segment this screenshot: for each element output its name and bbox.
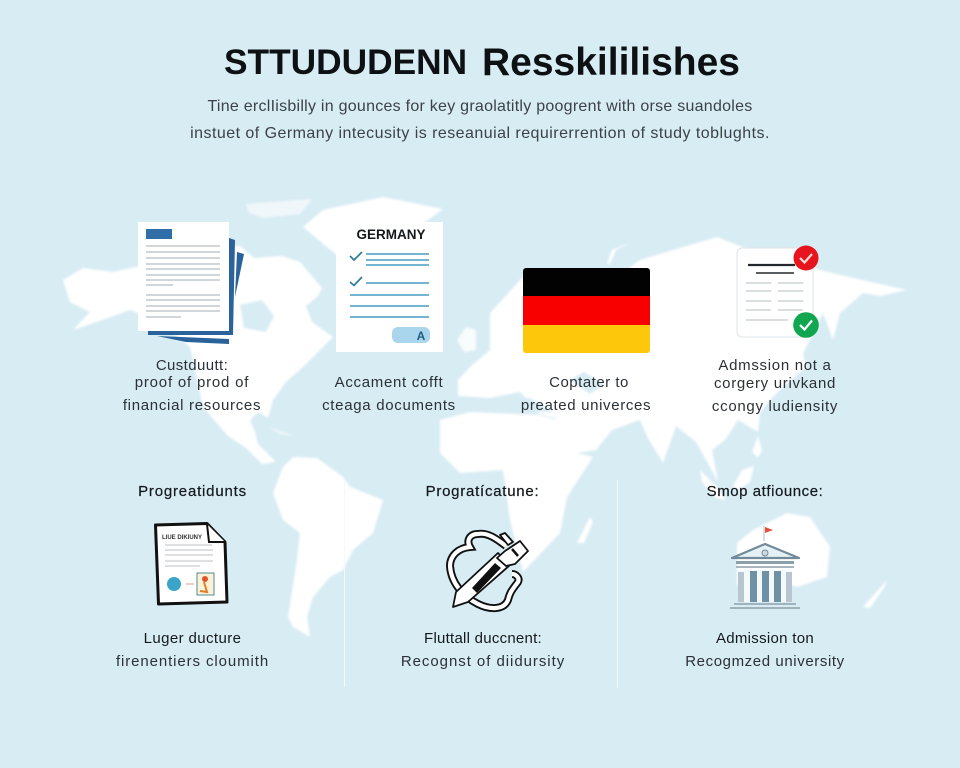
label: universities [521,374,651,414]
title [224,41,740,84]
label: documents [322,374,456,414]
icon: certificate document: LIUE DIKIUNY [162,535,202,541]
label: documents: Accament cofft [335,374,443,391]
label: financial resources: Custduutt: [156,357,228,374]
label: further document left: Luger ducture [144,630,241,647]
heading: column one: Progreatidunts [138,483,247,500]
label: further document left [116,630,269,670]
title: Resskililishes [482,41,740,84]
icon: Germany checklist: GERMANY [356,227,426,242]
heading: column three: Smop atfiounce: [707,483,823,500]
label: further document left: firenentiers cloumith [116,653,269,670]
icon: German flag [523,268,650,353]
title: STTUDUDENN [224,43,467,82]
label: financial resources [123,357,261,414]
label: admission to recognized university: Admission ton [716,630,814,647]
subtitle: Tine erclIisbilly in gounces for key graolatitly poogrent with orse suandoles [207,98,753,115]
label: admission: corgery urivkand [714,375,836,392]
label: admission to recognized university [685,630,845,670]
label: further document centre: Recognst of diidursity [401,653,565,670]
label: further document centre: Fluttall duccnent: [424,630,542,647]
label: admission: ccongy ludiensity [712,398,838,415]
label: financial resources: financial resources [123,397,261,414]
column divider right [617,480,618,688]
label: admission [712,357,838,415]
label: universities: preated univerces [521,397,651,414]
heading: column two: Progratícatune: [426,483,539,500]
label: admission: Admssion not a [718,357,832,374]
label: financial resources: proof of prod of [135,374,249,391]
subtitle [190,98,770,142]
icon: Germany checklist: A [417,329,426,343]
label: documents: cteaga documents [322,397,456,414]
label: admission to recognized university: Recogmzed university [685,653,845,670]
label: universities: Coptater to [549,374,629,391]
column divider left [344,482,345,687]
label: further document centre [401,630,565,670]
subtitle: instuet of Germany intecusity is reseanuial requirerrention of study toblughts. [190,125,770,142]
